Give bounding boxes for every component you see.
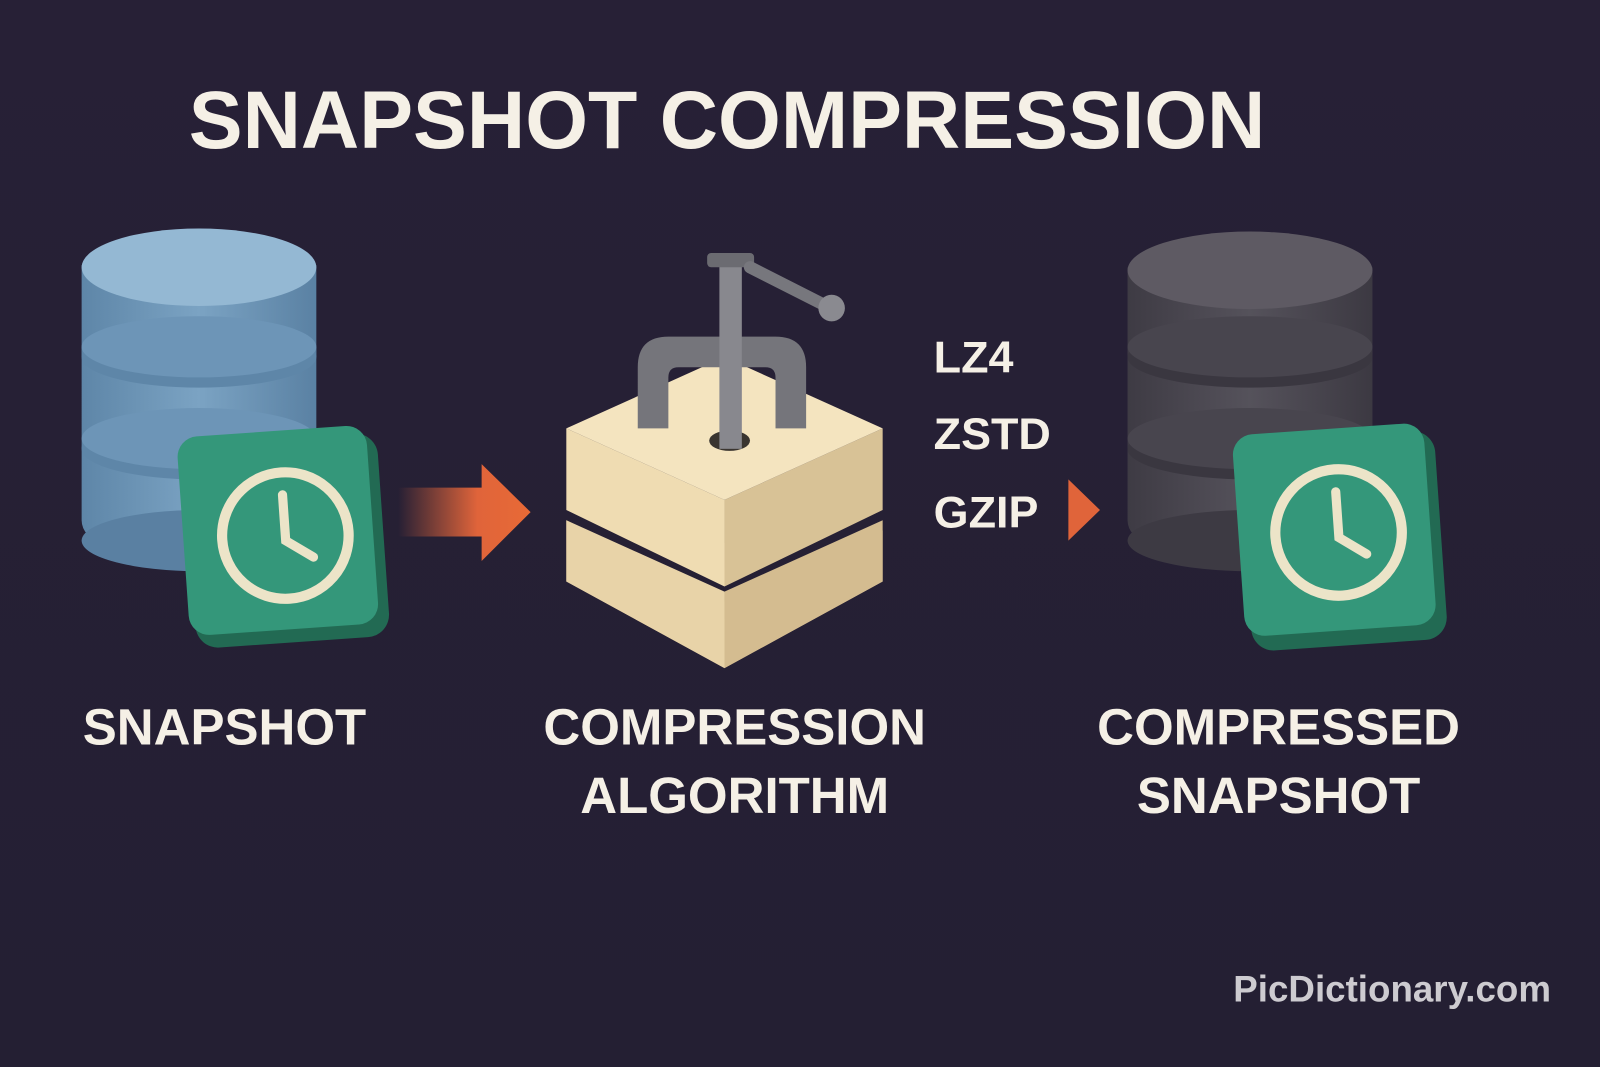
- icon: gray compressed database: [1128, 232, 1448, 652]
- title: SNAPSHOT COMPRESSION: [189, 75, 1265, 166]
- icon: blue database snapshot: [82, 228, 391, 650]
- label: compression algorithm: COMPRESSION: [543, 699, 926, 756]
- icon: compression block with clamp: [566, 253, 883, 668]
- arrow: small triangle: [1068, 479, 1100, 541]
- icon: clock tile: [1232, 422, 1448, 652]
- text: algorithm list: [934, 331, 1051, 537]
- icon: clock tile: [176, 424, 391, 650]
- text: algorithm list: ZSTD: [934, 408, 1051, 459]
- watermark: PicDictionary.com: [1233, 969, 1551, 1010]
- text: algorithm list: GZIP: [934, 486, 1038, 537]
- arrow: snapshot to compression: [398, 464, 531, 561]
- text: algorithm list: LZ4: [934, 331, 1014, 382]
- label: compression algorithm: ALGORITHM: [580, 767, 889, 824]
- label: compressed snapshot: SNAPSHOT: [1137, 767, 1420, 824]
- label: snapshot: SNAPSHOT: [83, 699, 366, 756]
- label: compressed snapshot: COMPRESSED: [1097, 699, 1460, 756]
